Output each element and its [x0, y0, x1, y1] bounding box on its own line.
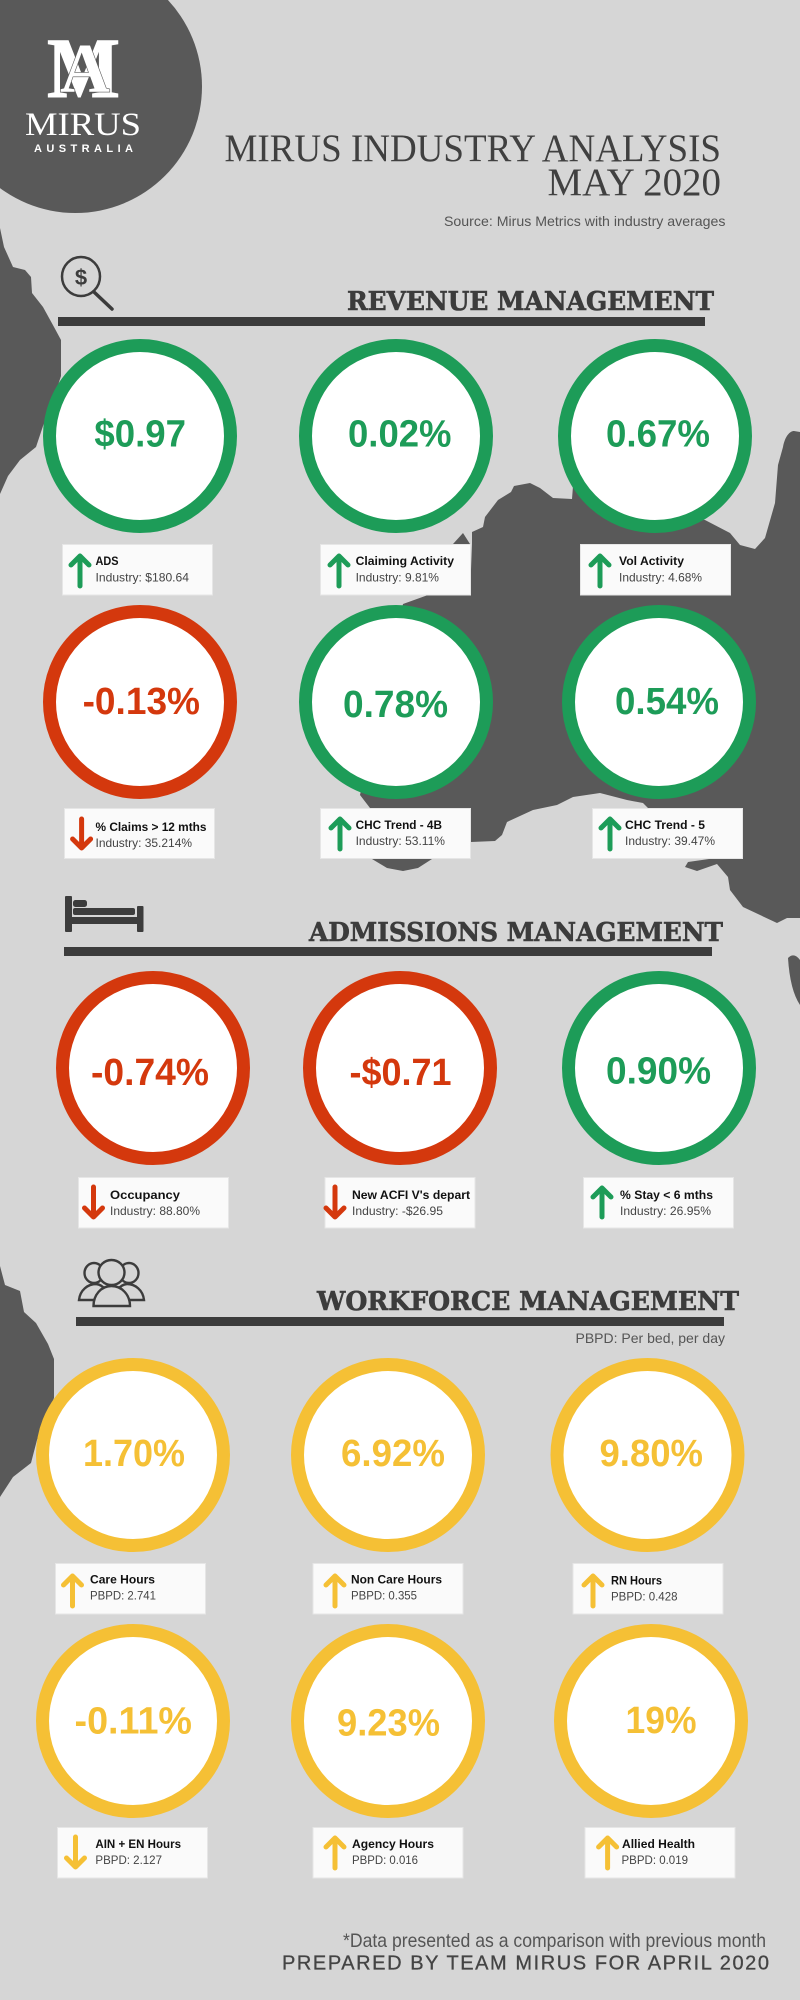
metric: Vol Activity: Industry: 4.68% [619, 570, 702, 584]
icon: magnifier with dollar: $ [75, 265, 87, 290]
metric: CHC Trend - 5: CHC Trend - 5 [625, 818, 705, 832]
metric: Care Hours: Care Hours [90, 1573, 155, 1587]
metric: % Claims > 12 mths: Industry: 35.214% [96, 836, 192, 850]
metric: AIN + EN Hours [42, 1630, 224, 1878]
metric: Allied Health: 19% [626, 1700, 696, 1742]
heading: workforce management: WORKFORCE MANAGEMENT [316, 1287, 740, 1317]
metric: Vol Activity [564, 346, 746, 595]
metric: New ACFI V's depart [310, 978, 490, 1228]
metric: Agency Hours: PBPD: 0.016 [352, 1853, 418, 1867]
metric: AIN + EN Hours: PBPD: 2.127 [95, 1853, 162, 1867]
metric: % Stay < 6 mths [568, 978, 750, 1228]
metric: RN Hours: 9.80% [600, 1433, 703, 1475]
metric: % Stay < 6 mths: 0.90% [606, 1051, 711, 1093]
metric: % Claims > 12 mths: -0.13% [83, 681, 200, 723]
metric: CHC Trend - 5: Industry: 39.47% [625, 834, 715, 848]
logo subtitle: AUSTRALIA [34, 143, 133, 155]
metric: New ACFI V's depart: New ACFI V's depart [352, 1188, 470, 1202]
logo monogram: A [60, 31, 110, 108]
metric: % Claims > 12 mths: % Claims > 12 mths [96, 820, 207, 834]
icon: magnifier with dollar [62, 257, 112, 309]
map background: Australia silhouette [0, 228, 800, 1497]
title [224, 127, 721, 204]
metric: % Stay < 6 mths: Industry: 26.95% [620, 1204, 711, 1218]
metric: Vol Activity: 0.67% [606, 413, 710, 455]
metric: CHC Trend - 4B: CHC Trend - 4B [356, 818, 442, 832]
metric: Allied Health: Allied Health [622, 1837, 695, 1851]
metric: Occupancy: -0.74% [91, 1052, 209, 1094]
metric: % Stay < 6 mths: % Stay < 6 mths [620, 1188, 713, 1202]
metric: Non Care Hours: PBPD: 0.355 [351, 1589, 417, 1603]
metric: ADS [50, 346, 230, 595]
metric: Occupancy: Occupancy [110, 1188, 180, 1202]
metric: New ACFI V's depart: Industry: -$26.95 [352, 1204, 443, 1218]
metric: CHC Trend - 4B [306, 612, 486, 858]
metric: New ACFI V's depart: -$0.71 [350, 1052, 452, 1094]
metric: CHC Trend - 5: 0.54% [615, 681, 719, 723]
metric: Non Care Hours: Non Care Hours [351, 1573, 442, 1587]
icon: bed [65, 896, 144, 932]
metric: RN Hours: PBPD: 0.428 [611, 1590, 678, 1604]
metric: CHC Trend - 4B: 0.78% [343, 684, 448, 726]
metric: Non Care Hours: 6.92% [341, 1433, 445, 1475]
metric: Care Hours: 1.70% [83, 1433, 185, 1475]
metric: Vol Activity: Vol Activity [619, 554, 684, 568]
logo monogram: M [47, 20, 120, 116]
title: MAY 2020 [548, 161, 721, 204]
logo name: MIRUS [25, 107, 141, 143]
metric: Claiming Activity: Claiming Activity [356, 554, 454, 568]
metric: Agency Hours: 9.23% [337, 1703, 440, 1745]
source note: Source: Mirus Metrics with industry averages [444, 213, 726, 229]
PBPD note: PBPD: Per bed, per day [576, 1330, 725, 1346]
heading: admissions management: ADMISSIONS MANAGEMENT [308, 918, 724, 948]
icon: people [79, 1260, 144, 1306]
metric: Allied Health [560, 1630, 742, 1878]
metric: ADS: $0.97 [94, 413, 186, 455]
metric: RN Hours: RN Hours [611, 1574, 662, 1588]
metric: Claiming Activity: Industry: 9.81% [356, 570, 439, 584]
metric: Occupancy: Industry: 88.80% [110, 1204, 200, 1218]
metric: AIN + EN Hours: AIN + EN Hours [95, 1837, 181, 1851]
metric: CHC Trend - 5 [568, 612, 750, 858]
logo: dark circle with Mirus Australia wordmark [0, 0, 202, 213]
metric: RN Hours [557, 1364, 738, 1614]
metric: ADS: ADS [96, 554, 118, 568]
footer credit: PREPARED BY TEAM MIRUS FOR APRIL 2020 [282, 1952, 769, 1974]
metric: Non Care Hours [298, 1364, 478, 1614]
metric: CHC Trend - 4B: Industry: 53.11% [356, 834, 445, 848]
heading: revenue management: REVENUE MANAGEMENT [347, 287, 715, 317]
metric: Claiming Activity: 0.02% [348, 413, 452, 455]
metric: Agency Hours [298, 1630, 478, 1878]
metric: Care Hours: PBPD: 2.741 [90, 1589, 156, 1603]
metric: Allied Health: PBPD: 0.019 [622, 1853, 688, 1867]
metric: Occupancy [62, 978, 244, 1228]
metric: Claiming Activity [306, 346, 486, 595]
footer note: *Data presented as a comparison with previous month [343, 1930, 766, 1952]
metric: AIN + EN Hours: -0.11% [74, 1701, 192, 1743]
metric: Agency Hours: Agency Hours [352, 1837, 434, 1851]
metric: ADS: Industry: $180.64 [96, 570, 189, 584]
metric: Care Hours [42, 1364, 224, 1614]
metric: % Claims > 12 mths [50, 612, 230, 858]
title: MIRUS INDUSTRY ANALYSIS [224, 127, 721, 170]
